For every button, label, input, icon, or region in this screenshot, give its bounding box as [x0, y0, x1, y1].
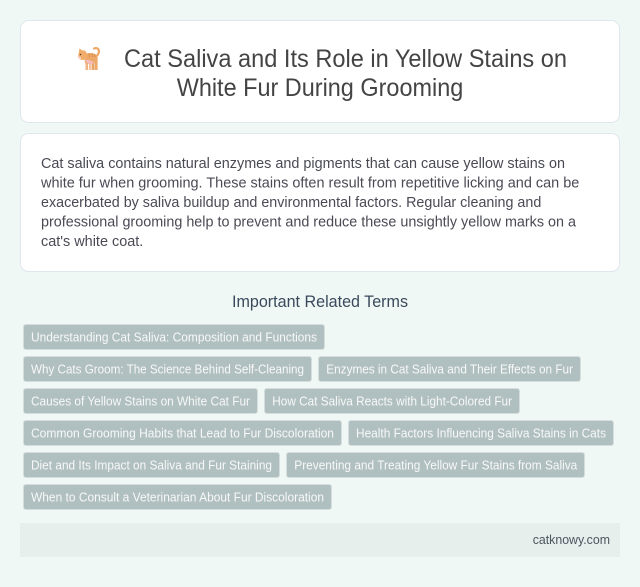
tag: when to consult: When to Consult a Veterinarian About Fur Discoloration	[31, 490, 324, 504]
description text: professional grooming help to prevent and reduce these unsightly yellow marks on a	[41, 214, 576, 230]
description text: exacerbated by saliva buildup and environmental factors. Regular cleaning and	[41, 195, 541, 211]
description text	[40, 156, 579, 250]
tag: when to consult	[24, 484, 332, 510]
description text: white fur when grooming. These stains often result from repetitive licking and can be	[40, 175, 579, 191]
tag: how cat saliva reacts: How Cat Saliva Reacts with Light-Colored Fur	[272, 394, 513, 408]
tag: why cats groom	[24, 356, 312, 382]
title text: Cat Saliva and Its Role in Yellow Stains on	[124, 45, 567, 73]
tag: preventing and treating	[286, 452, 584, 478]
tag list	[24, 324, 614, 510]
tag: enzymes: Enzymes in Cat Saliva and Their Effects on Fur	[326, 362, 574, 376]
title text: White Fur During Grooming	[177, 74, 463, 102]
tag: why cats groom: Why Cats Groom: The Science Behind Self-Cleaning	[31, 362, 304, 376]
description text: Cat saliva contains natural enzymes and pigments that can cause yellow stains on	[41, 156, 565, 172]
tag: understanding cat saliva	[24, 324, 324, 350]
heading: important related terms: Important Related Terms	[232, 293, 408, 311]
footer text: catknowy.com	[533, 533, 610, 547]
tag: understanding cat saliva: Understanding Cat Saliva: Composition and Functions	[31, 330, 317, 344]
title text	[124, 45, 567, 102]
tag: health factors: Health Factors Influencing Saliva Stains in Cats	[356, 426, 606, 440]
tag: diet	[24, 452, 280, 478]
tag: causes of yellow stains	[24, 388, 258, 414]
footer bar	[20, 523, 620, 557]
tag: causes of yellow stains: Causes of Yellow Stains on White Cat Fur	[31, 394, 251, 408]
icon: cat	[78, 48, 99, 70]
tag: common grooming habits	[24, 420, 342, 446]
tag: health factors	[348, 420, 614, 446]
description text: cat's white coat.	[41, 234, 143, 250]
tag: enzymes	[318, 356, 580, 382]
tag: preventing and treating: Preventing and Treating Yellow Fur Stains from Saliva	[294, 458, 578, 472]
tag: how cat saliva reacts	[264, 388, 520, 414]
tag: common grooming habits: Common Grooming Habits that Lead to Fur Discoloration	[31, 426, 334, 440]
panel: title card	[20, 20, 620, 122]
panel: description card	[20, 134, 620, 272]
tag: diet: Diet and Its Impact on Saliva and Fur Staining	[31, 458, 272, 472]
